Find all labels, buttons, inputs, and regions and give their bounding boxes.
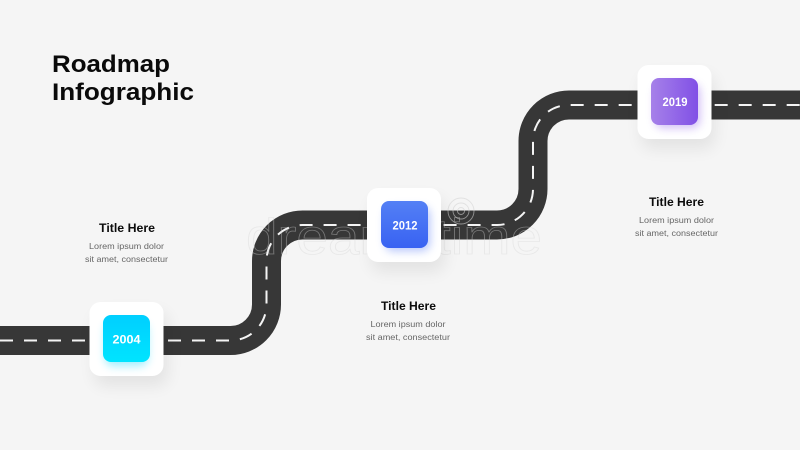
milestone 2012: 2012: [392, 220, 418, 232]
text block: 2012: sit amet, consectetur: [366, 332, 450, 342]
text block: 2012: Lorem ipsum dolor: [370, 319, 446, 329]
text block: 2004: [85, 223, 168, 264]
text block: 2019: Title Here: [649, 197, 704, 209]
milestone 2019: [638, 65, 715, 149]
watermark: dreamstime: [246, 209, 542, 265]
milestone 2004: 2004: [112, 334, 141, 346]
text block: 2004: sit amet, consectetur: [85, 254, 168, 264]
text block: 2019: sit amet, consectetur: [635, 228, 718, 238]
title: Infographic: [52, 79, 194, 106]
text block: 2012: Title Here: [381, 301, 436, 313]
text block: 2019: [635, 197, 718, 238]
title: [52, 51, 194, 106]
text block: 2004: Lorem ipsum dolor: [89, 241, 164, 251]
road: [0, 105, 800, 340]
milestone 2019: 2019: [662, 97, 688, 109]
text block: 2019: Lorem ipsum dolor: [639, 215, 714, 225]
title: Roadmap: [52, 51, 170, 78]
milestone 2012: [367, 188, 445, 272]
milestone 2004: [90, 302, 168, 386]
text block: 2004: Title Here: [99, 223, 155, 235]
text block: 2012: [366, 301, 450, 342]
